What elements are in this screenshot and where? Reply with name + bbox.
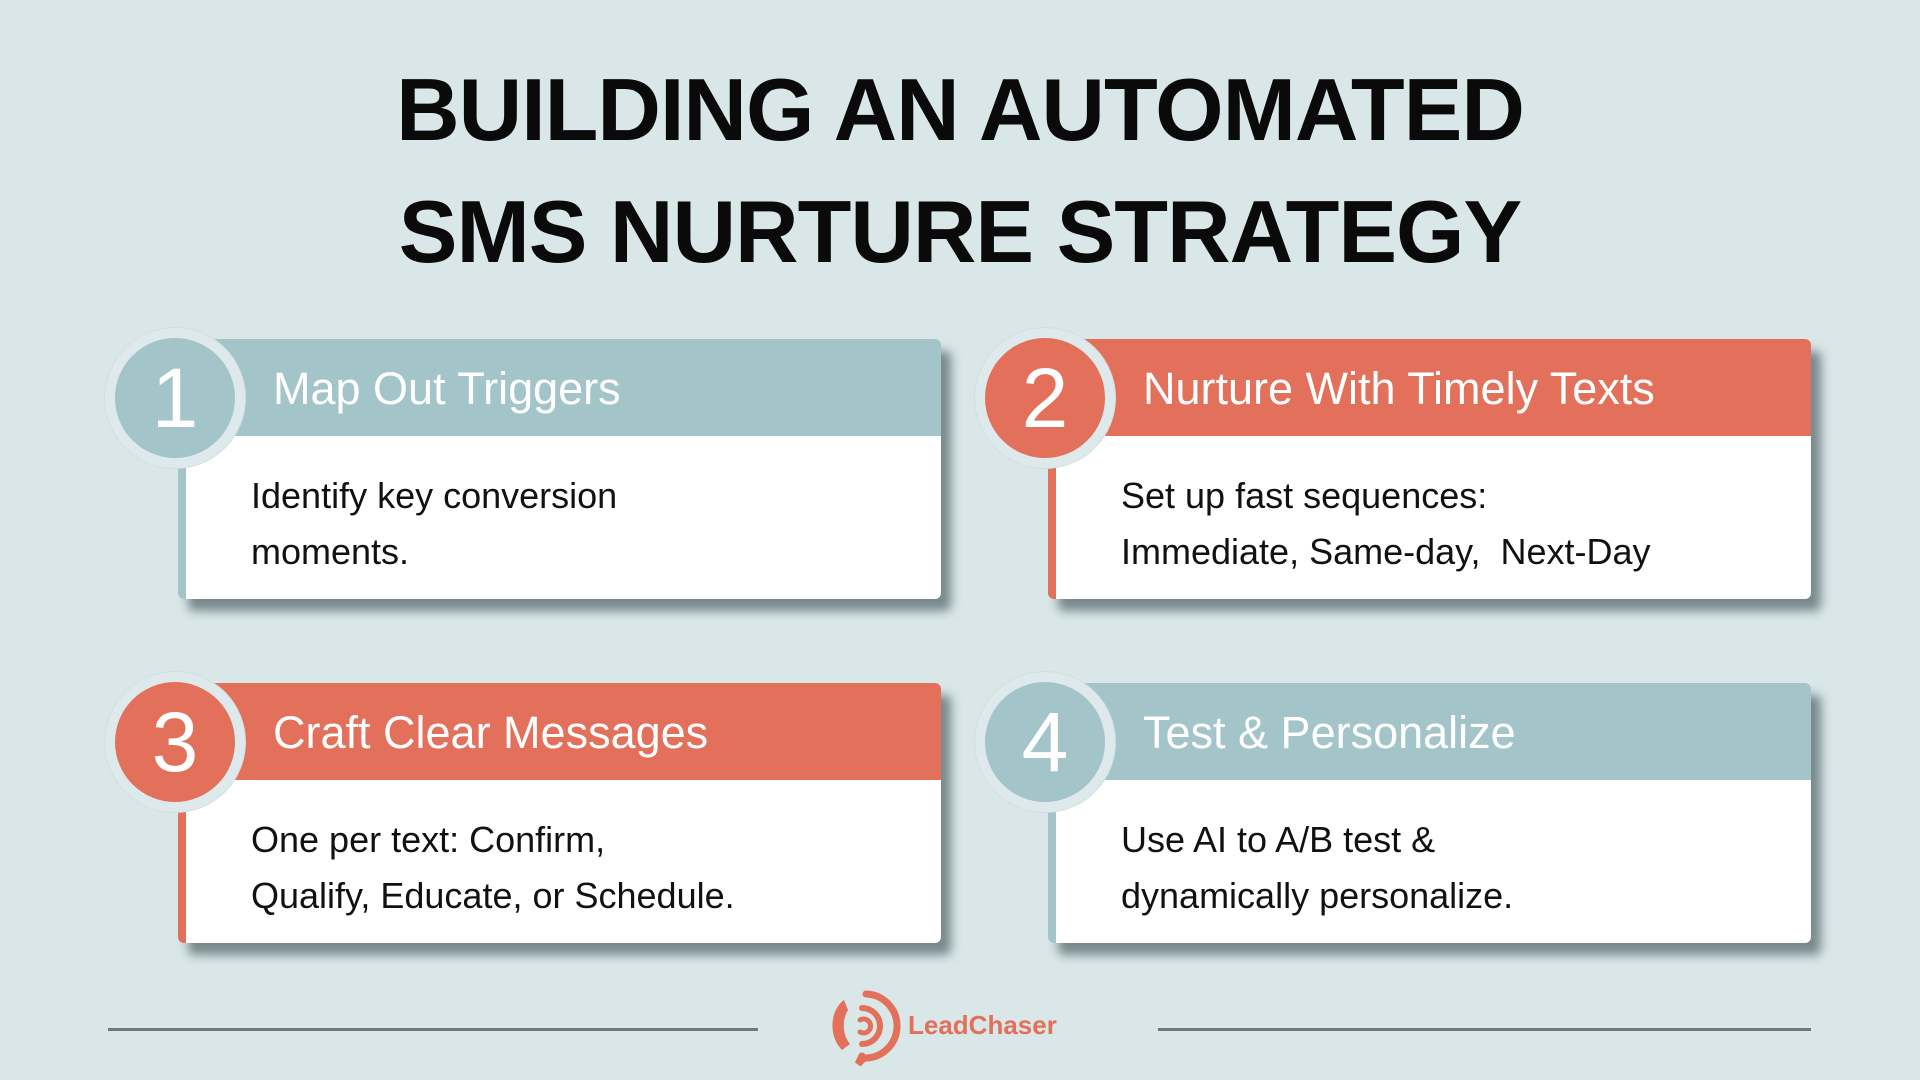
title: SMS NURTURE STRATEGY: [399, 182, 1521, 281]
text: step 4: dynamically personalize.: [1121, 875, 1513, 916]
text: step 4: Use AI to A/B test &: [1121, 819, 1435, 860]
heading: step 4: Test & Personalize: [1143, 707, 1516, 758]
panel: step 2: [974, 327, 1828, 618]
icon: number 1: 1: [152, 351, 198, 445]
icon: number 4: 4: [1022, 695, 1068, 789]
text: step 3: [251, 819, 735, 916]
heading: step 2: Nurture With Timely Texts: [1143, 363, 1655, 414]
icon: number 3: 3: [152, 695, 198, 789]
icon: number 2: 2: [1022, 351, 1068, 445]
text: step 2: Immediate, Same-day, Next-Day: [1121, 531, 1651, 572]
text: step 1: Identify key conversion: [251, 475, 617, 516]
icon: number 4: [974, 671, 1116, 813]
heading: step 3: Craft Clear Messages: [273, 707, 708, 758]
title: [396, 60, 1524, 281]
icon: number 3: [104, 671, 246, 813]
text: step 2: [1121, 475, 1651, 572]
icon: phone signal: [832, 990, 900, 1066]
logo text: LeadChaser: [908, 1010, 1057, 1040]
text: step 1: [251, 475, 617, 572]
text: step 1: moments.: [251, 531, 409, 572]
text: step 2: Set up fast sequences:: [1121, 475, 1487, 516]
panel: step 1: [104, 327, 958, 618]
text: step 4: [1121, 819, 1513, 916]
title: BUILDING AN AUTOMATED: [396, 60, 1524, 159]
icon: number 1: [104, 327, 246, 469]
heading: step 1: Map Out Triggers: [273, 363, 621, 414]
panel: step 3: [104, 671, 958, 962]
panel: step 4: [974, 671, 1828, 962]
icon: number 2: [974, 327, 1116, 469]
text: step 3: Qualify, Educate, or Schedule.: [251, 875, 735, 916]
logo: LeadChaser: [832, 990, 1057, 1066]
text: step 3: One per text: Confirm,: [251, 819, 605, 860]
